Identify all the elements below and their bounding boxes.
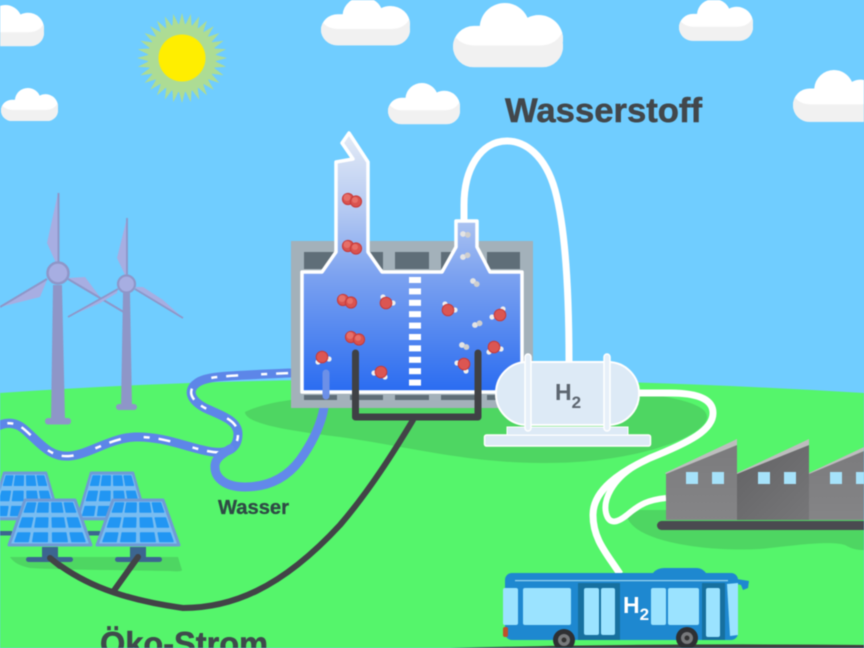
oxygen molecules <box>337 193 365 345</box>
water inlet end <box>322 373 330 396</box>
H2 tank label: H <box>555 379 572 405</box>
hydrogen molecules <box>458 231 484 351</box>
label: Wasser: Wasser <box>218 497 289 519</box>
front solar panel right <box>97 500 179 562</box>
water molecules <box>315 294 506 380</box>
membrane <box>409 277 421 386</box>
H2 tank label: 2 <box>572 393 581 412</box>
clouds <box>0 0 864 125</box>
H2 bus label: H <box>623 592 640 618</box>
plant: electrolyser <box>291 133 533 408</box>
green hill <box>0 379 864 648</box>
hydrogen storage tank <box>484 354 650 446</box>
ground shadows <box>10 393 864 571</box>
ground line <box>450 644 864 648</box>
water pipe with dashes <box>0 373 326 487</box>
electrodes <box>356 353 478 417</box>
bus <box>503 568 749 648</box>
bus wheels <box>553 627 698 648</box>
hydrogen pipes: storage to factory and bus <box>593 393 713 574</box>
heading: Wasserstoff: Wasserstoff <box>505 92 703 130</box>
wind turbine: small <box>68 218 183 410</box>
H2 bus label: 2 <box>640 605 649 624</box>
electrolysis tank <box>302 133 522 392</box>
plant backing panel <box>291 241 533 408</box>
hydrogen pipe: plant to storage tank <box>464 141 569 362</box>
solar panels <box>0 473 179 562</box>
wind turbine: large <box>0 193 127 424</box>
power cable from solar panels <box>50 420 413 608</box>
icon: sun <box>130 6 234 110</box>
front solar panel left <box>9 500 91 562</box>
factory <box>657 439 864 530</box>
cable ends on solar stands <box>50 557 138 568</box>
